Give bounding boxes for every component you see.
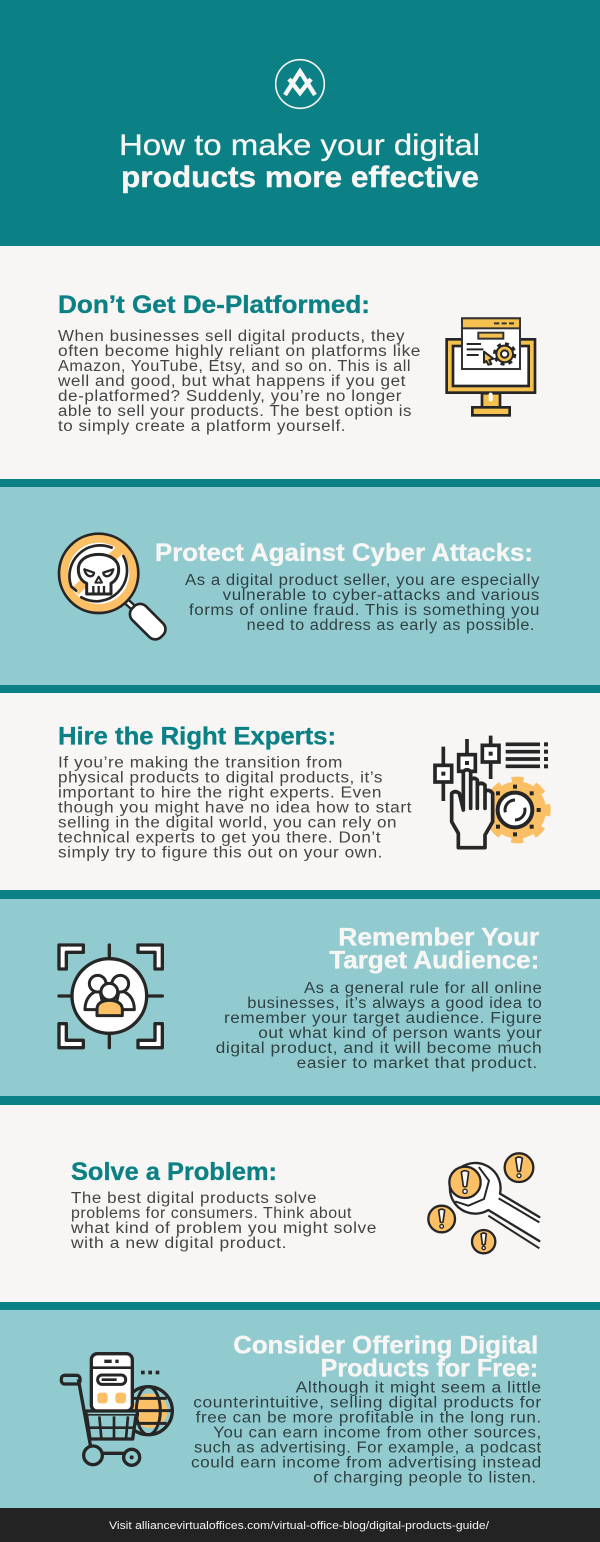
panel: header: [0, 0, 600, 246]
text block: If you’re making the transition from: [58, 754, 343, 772]
text block: [185, 572, 540, 634]
text block: of charging people to listen.: [313, 1470, 537, 1487]
text block: You can earn income from other sources,: [213, 1425, 542, 1442]
text block: need to address as early as possible.: [247, 617, 535, 634]
text block: remember your target audience. Figure: [224, 1010, 542, 1027]
text block: what kind of problem you might solve: [70, 1220, 377, 1237]
text block: well and good, but what happens if you get: [57, 373, 406, 390]
text block: selling in the digital world, you can rely on: [58, 814, 397, 832]
text block: simply try to figure this out on your own.: [58, 844, 383, 862]
heading: Protect Against Cyber Attacks:: [155, 539, 533, 567]
heading: Products for Free:: [321, 1354, 538, 1382]
panel: don't get de-platformed: [0, 246, 600, 479]
text block: free can be more profitable in the long run.: [196, 1410, 542, 1427]
icon: shopping cart, phone and globe: [61, 1354, 172, 1465]
title: products more effective: [121, 161, 479, 194]
text block: vulnerable to cyber-attacks and various: [223, 587, 540, 604]
text block: [70, 1190, 377, 1252]
panel: protect against cyber attacks: [0, 487, 600, 685]
divider bar: [0, 479, 600, 487]
text block: with a new digital product.: [70, 1235, 287, 1252]
text block: physical products to digital products, it’s: [58, 770, 383, 786]
text block: [216, 980, 542, 1072]
text block: Amazon, YouTube, Etsy, and so on. This is all: [58, 358, 411, 375]
text block: [58, 754, 412, 862]
text block: As a digital product seller, you are especially: [185, 572, 540, 589]
heading: Remember Your: [338, 924, 540, 952]
title: How to make your digital: [119, 129, 480, 162]
footer source text: Visit alliancevirtualoffices.com/virtual-office-blog/digital-products-guide/: [109, 1520, 490, 1532]
text block: though you might have no idea how to start: [58, 800, 412, 816]
text block: technical experts to get you there. Don’t: [58, 830, 381, 846]
icon: monitor with settings window: [447, 318, 535, 415]
panel: footer: [0, 1508, 600, 1542]
text block: businesses, it’s always a good idea to: [247, 995, 542, 1012]
text block: [57, 328, 421, 435]
title: [119, 129, 480, 194]
text block: As a general rule for all online: [304, 980, 542, 997]
panel: remember your target audience: [0, 899, 600, 1096]
panel: hire the right experts: [0, 693, 600, 890]
text block: important to hire the right experts. Even: [58, 784, 382, 802]
divider bar: [0, 890, 600, 899]
icon: audience in target: [59, 945, 162, 1048]
text block: problems for consumers. Think about: [71, 1205, 352, 1222]
heading: Don’t Get De-Platformed:: [58, 291, 370, 319]
text block: [191, 1380, 542, 1487]
text block: The best digital products solve: [71, 1190, 317, 1207]
heading: Target Audience:: [329, 946, 539, 974]
text block: often become highly reliant on platforms like: [58, 343, 421, 360]
heading: [329, 924, 540, 974]
divider bar: [0, 685, 600, 693]
heading: Hire the Right Experts:: [58, 722, 336, 750]
text block: counterintuitive, selling digital products for: [193, 1395, 542, 1412]
heading: Solve a Problem:: [71, 1158, 277, 1186]
panel: solve a problem: [0, 1105, 600, 1302]
divider bar: [0, 1096, 600, 1105]
text block: forms of online fraud. This is something you: [189, 602, 540, 619]
text block: to simply create a platform yourself.: [58, 418, 346, 435]
icon: alert 2: [449, 1167, 481, 1198]
icon: alert 4: [472, 1230, 495, 1253]
icon: skull under magnifying glass: [59, 534, 169, 643]
text block: could earn income from advertising instead: [191, 1455, 542, 1472]
icon: wrench with alerts: [428, 1153, 539, 1253]
icon: hand on sliders and gear: [435, 736, 548, 848]
heading: Consider Offering Digital: [233, 1332, 538, 1360]
text block: digital product, and it will become much: [216, 1040, 542, 1057]
text block: easier to market that product.: [297, 1055, 538, 1072]
text block: able to sell your products. The best option is: [58, 403, 412, 420]
divider bar: [0, 1302, 600, 1310]
text block: such as advertising. For example, a podcast: [194, 1440, 542, 1457]
text block: out what kind of person wants your: [258, 1025, 542, 1042]
heading: [233, 1332, 538, 1382]
panel: consider offering digital products for free: [0, 1310, 600, 1508]
icon: alert 3: [428, 1206, 455, 1232]
text block: When businesses sell digital products, they: [58, 328, 405, 345]
text block: de-platformed? Suddenly, you’re no longer: [58, 388, 402, 405]
text block: Although it might seem a little: [296, 1380, 542, 1397]
icon: logo: [276, 60, 324, 108]
icon: alert 1: [505, 1153, 533, 1182]
